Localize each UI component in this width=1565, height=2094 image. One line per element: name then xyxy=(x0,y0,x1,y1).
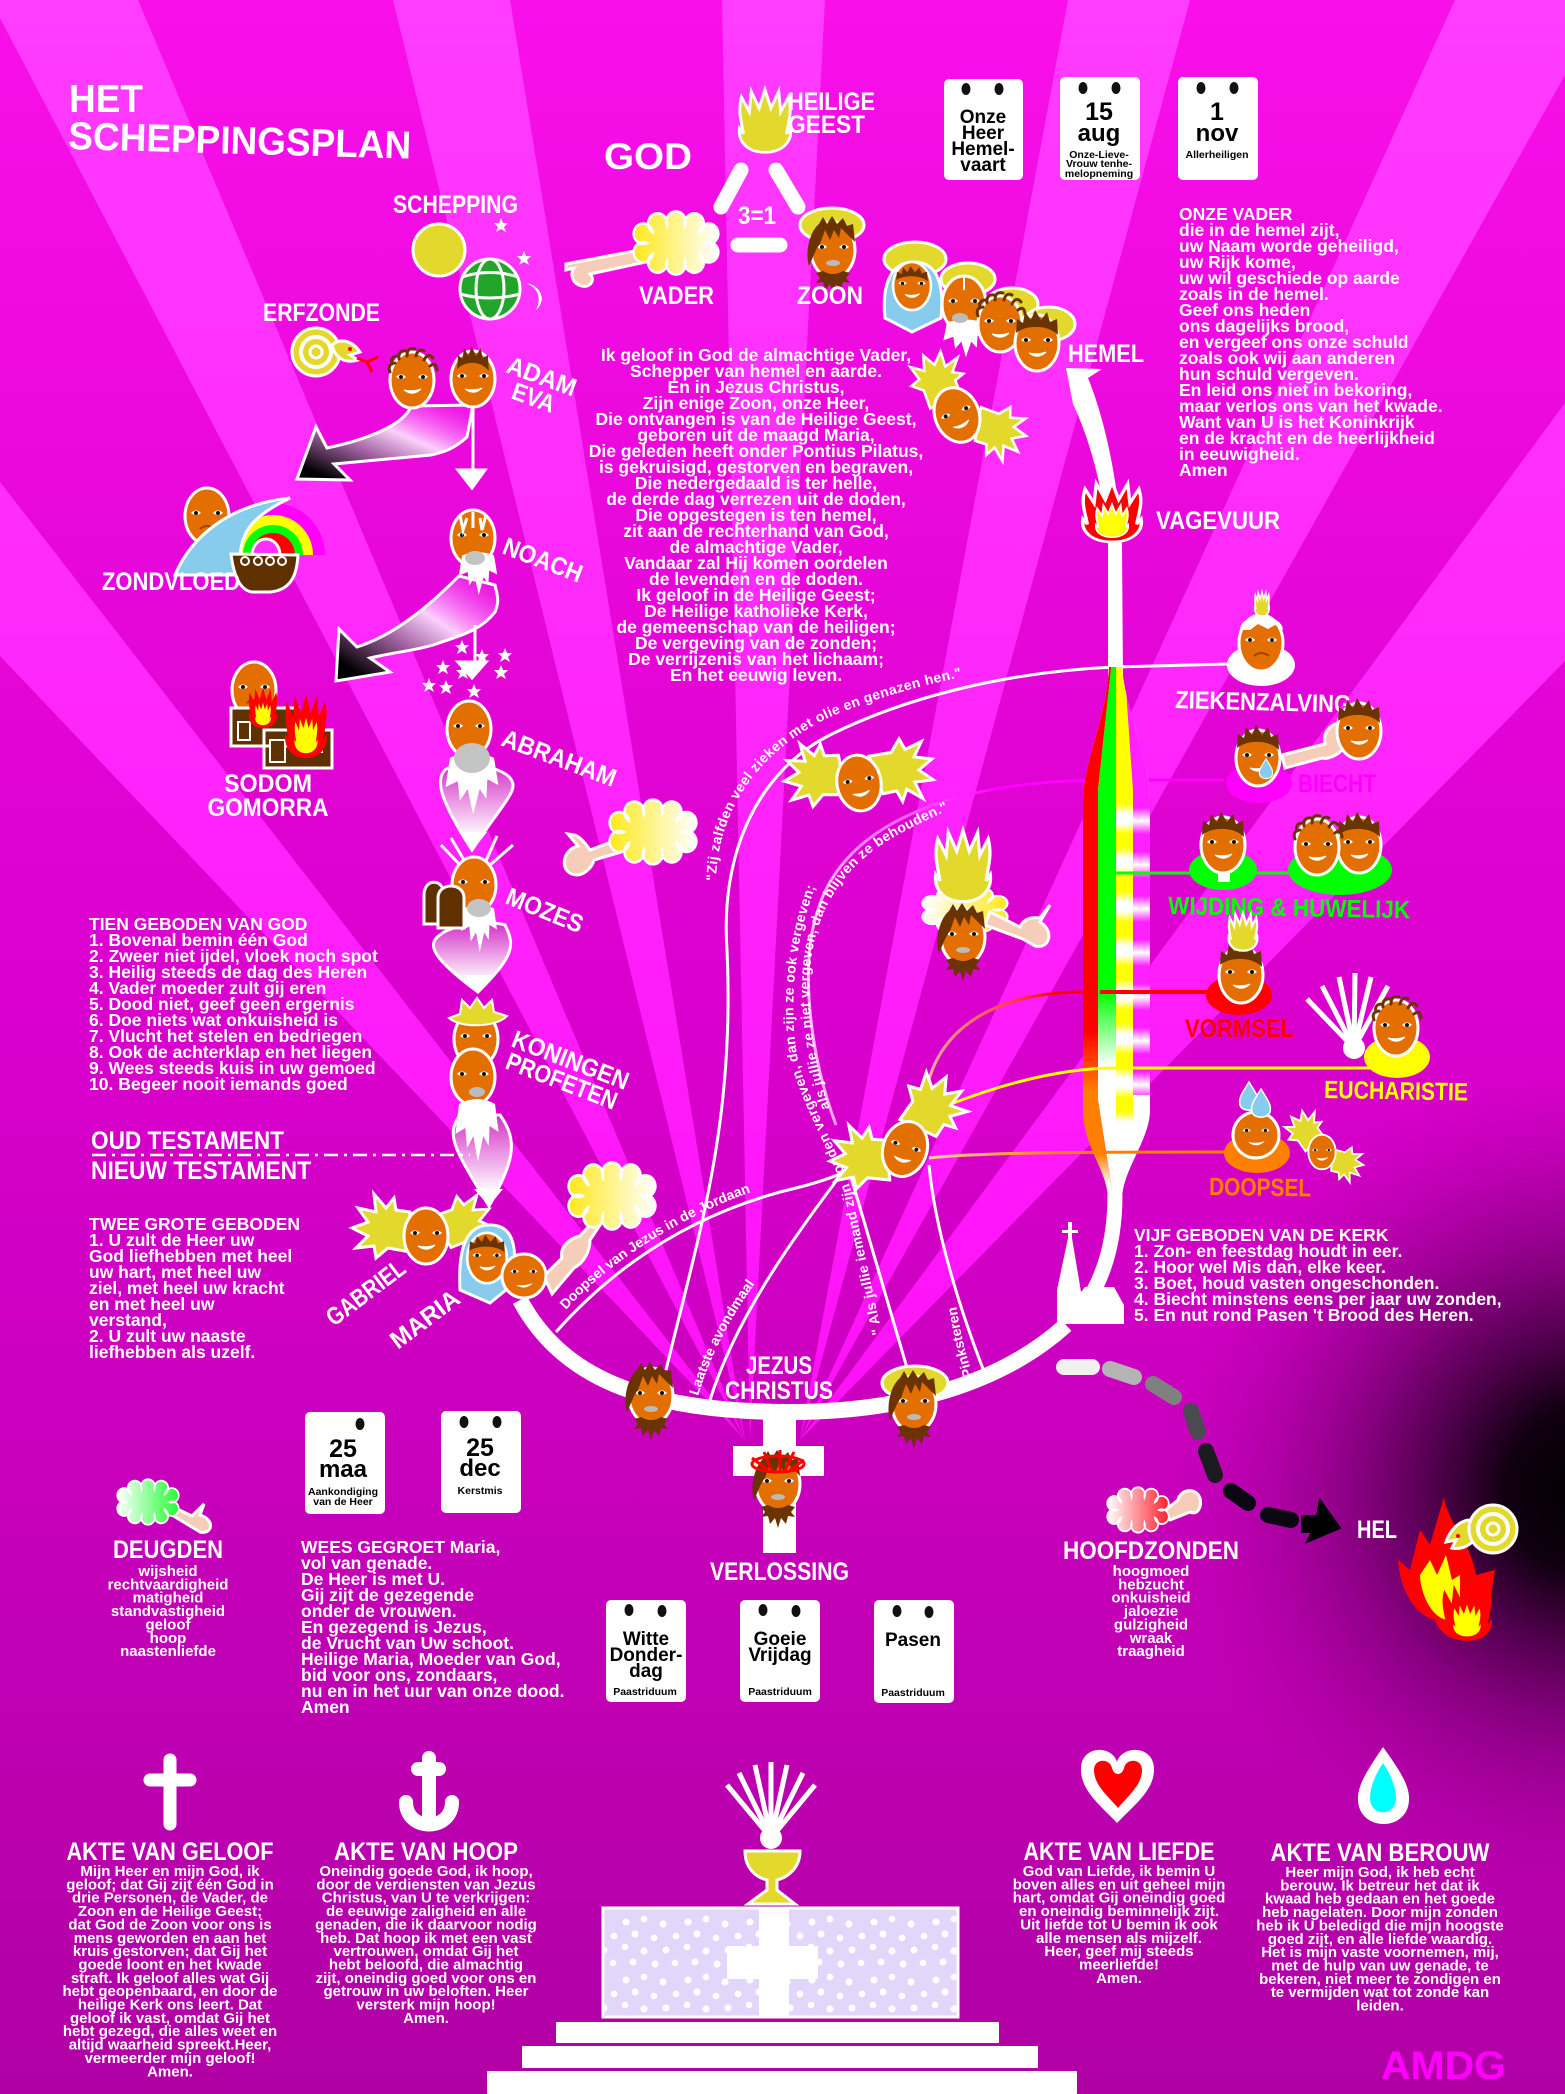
act of contrition: goed zijt, en alle liefde waardig. xyxy=(1268,1931,1492,1948)
list: deadly sins: traagheid xyxy=(1117,1643,1185,1660)
God the Father cloud with hand xyxy=(566,211,718,286)
text: apostles creed: De vergeving van de zonden; xyxy=(635,633,877,653)
text: Hail Mary: En gezegend is Jezus, xyxy=(301,1617,487,1637)
icon: hell fire and serpent xyxy=(1398,1497,1517,1641)
label: Sodom Gomorra: GOMORRA xyxy=(208,794,328,822)
calendar: Witte Donderdag: Witte xyxy=(623,1629,669,1650)
calendar: Onze Heer Hemelvaart: Hemel- xyxy=(951,139,1015,160)
act of hope: Amen. xyxy=(403,2010,449,2027)
text: five commandments of the church: 2. Hoor wel Mis dan, elke keer. xyxy=(1134,1257,1386,1277)
creation: sun, earth, stars xyxy=(413,218,542,319)
text: apostles creed: de derde dag verrezen uit de doden, xyxy=(606,489,906,509)
text: ten commandments: 7. Vlucht het stelen en bedriegen xyxy=(89,1026,362,1046)
act of faith: Amen. xyxy=(147,2063,193,2080)
calendar: 25 dec: dec xyxy=(459,1455,501,1482)
title xyxy=(68,78,412,168)
calendar: Witte Donderdag xyxy=(606,1600,686,1702)
altar steps xyxy=(487,2022,1077,2094)
God cloud with hand at Abraham xyxy=(564,800,696,875)
label: Sodom Gomorra: SODOM xyxy=(224,770,312,798)
text: apostles creed: En het eeuwig leven. xyxy=(670,665,842,685)
calendar: Goede Vrijdag: Goeie xyxy=(754,1629,806,1650)
curved text: sayings: Laatste avondmaal xyxy=(689,1278,754,1396)
calendar: 15 aug: 15 xyxy=(1085,98,1113,126)
act of faith: geloof ik vast, omdat Gij het xyxy=(70,2010,270,2027)
text: Hail Mary: bid voor ons, zondaars, xyxy=(301,1665,497,1685)
text: Hail Mary: onder de vrouwen. xyxy=(301,1601,457,1621)
act of love: God van Liefde, ik bemin U xyxy=(1023,1863,1215,1880)
act of contrition: berouw. Ik betreur het dat ik xyxy=(1280,1877,1480,1894)
text: Onze Vader prayer: en vergeef ons onze schuld xyxy=(1179,332,1408,352)
Eve xyxy=(389,349,437,408)
text: apostles creed: de gemeenschap van de heiligen; xyxy=(616,617,896,637)
list: virtues: matigheid xyxy=(133,1590,203,1607)
text: apostles creed: de almachtige Vader, xyxy=(669,537,843,557)
God with son and spirit in the middle xyxy=(923,830,1050,981)
list: deadly sins: hebzucht xyxy=(1118,1576,1184,1593)
icon: purgatory fire xyxy=(1083,482,1141,542)
text: five commandments of the church: 4. Biecht minstens eens per jaar uw zonden, xyxy=(1134,1289,1502,1309)
text: apostles creed: De Heilige katholieke Kerk, xyxy=(644,601,868,621)
sin arrow from Noah xyxy=(336,576,498,681)
act of contrition: AKTE VAN BEROUW xyxy=(1270,1839,1490,1867)
text: Hail Mary: Gij zijt de gezegende xyxy=(301,1585,474,1605)
heading: Hoofdzonden: HOOFDZONDEN xyxy=(1063,1537,1239,1565)
text: Onze Vader prayer: ons dagelijks brood, xyxy=(1179,316,1349,336)
calendar: 1 nov: Allerheiligen xyxy=(1185,149,1249,161)
calendar: 25 maa: Aankondiging xyxy=(308,1486,378,1498)
label: Hel: HEL xyxy=(1357,1516,1397,1544)
act of love: boven alles en uit geheel mijn xyxy=(1013,1876,1225,1893)
calendar: 25 dec xyxy=(441,1411,521,1513)
act of faith: Zoon en de Heilige Geest; xyxy=(78,1903,262,1920)
act of hope: Christus, van U te verkrijgen: xyxy=(322,1890,530,1907)
sacrament: holy orders and matrimony xyxy=(1116,812,1392,895)
text: ten commandments: 4. Vader moeder zult gij eren xyxy=(89,978,326,998)
calendar: 15 aug: melopneming xyxy=(1065,168,1133,180)
act of love: Heer, geef mij steeds xyxy=(1044,1943,1194,1960)
act of contrition: heb nagelaten. Door mijn zonden xyxy=(1262,1904,1498,1921)
angel at sacraments xyxy=(827,1064,977,1191)
label: Jezus Christus xyxy=(725,1352,833,1405)
sin arrow from Eve and Adam xyxy=(297,405,473,480)
label: Gabriel: GABRIEL xyxy=(321,1254,411,1332)
trinity triangle: 3=1 xyxy=(738,202,776,230)
calendar: 15 aug: Onze-Lieve- xyxy=(1069,149,1129,161)
label: Eva: EVA xyxy=(508,377,559,419)
label: Maria: MARIA xyxy=(385,1284,466,1355)
risen Jesus xyxy=(882,1366,948,1448)
act of faith: heilige Kerk ons leert. Dat xyxy=(78,1996,262,2014)
label: Zoon: ZOON xyxy=(797,282,863,310)
text: apostles creed: En in Jezus Christus, xyxy=(668,377,844,397)
text: ten commandments: 10. Begeer nooit iemands goed xyxy=(89,1074,348,1094)
calendar: Goede Vrijdag xyxy=(740,1600,820,1702)
calendar: 25 maa: 25 xyxy=(329,1435,357,1463)
label: Adam: ADAM xyxy=(503,351,580,402)
act of contrition: leiden. xyxy=(1356,1998,1404,2014)
act of contrition: met de hulp van uw genade, te xyxy=(1271,1957,1489,1974)
act of faith: altijd waarheid spreekt.Heer, xyxy=(69,2037,271,2054)
calendar: Witte Donderdag: dag xyxy=(629,1661,663,1682)
heading: God: GOD xyxy=(604,136,692,177)
curved text: sayings: "Zij zalfden veel zieken met olie en genazen hen." xyxy=(706,668,960,880)
divider: old and new testament xyxy=(91,1127,470,1185)
text: Onze Vader prayer: zoals ook wij aan anderen xyxy=(1179,348,1395,368)
label: Koningen Profeten: PROFETEN xyxy=(502,1047,621,1116)
text: two great commandments: verstand, xyxy=(89,1310,167,1330)
text: ten commandments: TIEN GEBODEN VAN GOD xyxy=(89,914,307,934)
act of hope: zijt, oneindig goed voor ons en xyxy=(316,1970,536,1987)
calendar: 25 dec: 25 xyxy=(466,1434,494,1462)
text: Hail Mary: WEES GEGROET Maria, xyxy=(301,1537,500,1557)
calendar: 1 nov: 1 xyxy=(1210,98,1224,126)
trinity triangle xyxy=(721,170,798,245)
arc from church trunk xyxy=(1093,1195,1115,1292)
list: virtues: hoop xyxy=(150,1630,186,1647)
label: Heilige Geest: HEILIGE xyxy=(788,88,875,116)
kings and prophets xyxy=(449,998,511,1206)
calendar: 25 maa: van de Heer xyxy=(313,1496,373,1508)
text: Onze Vader prayer: Geef ons heden xyxy=(1179,300,1310,320)
icon: love heart xyxy=(1081,1750,1154,1823)
icon: hope anchor xyxy=(406,1758,452,1824)
sacrament: anointing of the sick xyxy=(1227,592,1295,686)
Adam xyxy=(451,346,495,407)
act of hope: de eeuwige zaligheid en alle xyxy=(326,1903,526,1920)
calendar: Pasen: Pasen xyxy=(885,1630,941,1651)
text: two great commandments: ziel, met heel uw kracht xyxy=(89,1278,285,1298)
text: five commandments of the church: 1. Zon- en feestdag houdt in eer. xyxy=(1134,1241,1402,1261)
sacrament: baptism xyxy=(929,1082,1365,1184)
text: Hail Mary: de Vrucht van Uw schoot. xyxy=(301,1633,514,1653)
label: Abraham: ABRAHAM xyxy=(498,724,620,793)
curved text: sayings: Pinksteren xyxy=(949,1307,972,1376)
label: Vagevuur: VAGEVUUR xyxy=(1156,507,1280,535)
list: virtues: geloof xyxy=(146,1616,191,1633)
text: Onze Vader prayer: hun schuld vergeven. xyxy=(1179,364,1359,384)
text: apostles creed: zit aan de rechterhand van God, xyxy=(623,521,889,541)
crucifix xyxy=(733,1415,824,1553)
calendar: Goede Vrijdag: Paastriduum xyxy=(748,1686,812,1698)
signature: AMDG: AMDG xyxy=(1381,2044,1506,2088)
act of hope: door de verdiensten van Jezus xyxy=(316,1876,536,1893)
text: apostles creed: Schepper van hemel en aarde. xyxy=(630,361,882,381)
Jesus at baptism xyxy=(625,1362,673,1440)
arrow: Noah to Abraham xyxy=(458,625,486,678)
act of hope: genaden, die ik daarvoor nodig xyxy=(315,1916,537,1933)
act of hope: AKTE VAN HOOP xyxy=(334,1838,518,1866)
main arc of salvation xyxy=(520,1300,1066,1412)
label: Heilige Geest xyxy=(788,88,875,139)
text: apostles creed: Ik geloof in God de almachtige Vader, xyxy=(601,345,911,365)
text: Onze Vader prayer: Want van U is het Koninkrijk xyxy=(1179,412,1415,432)
calendar: Onze Heer Hemelvaart: Heer xyxy=(962,123,1005,144)
list: virtues: standvastigheid xyxy=(111,1603,225,1620)
list: virtues: rechtvaardigheid xyxy=(108,1576,228,1593)
calendar: 25 maa xyxy=(305,1412,385,1514)
saints in heaven xyxy=(884,242,1075,371)
label: Erfzonde: ERFZONDE xyxy=(263,299,380,327)
text: apostles creed: geboren uit de maagd Maria, xyxy=(637,425,875,445)
act of hope: versterk mijn hoop! xyxy=(356,1996,496,2014)
label: Eucharistie: EUCHARISTIE xyxy=(1324,1076,1468,1107)
calendar: Pasen xyxy=(874,1600,954,1703)
text: Hail Mary: nu en in het uur van onze dood. xyxy=(301,1681,564,1701)
label: Koningen Profeten: KONINGEN xyxy=(508,1025,633,1096)
curved lines of Christ's sayings xyxy=(556,664,1228,1400)
text: apostles creed: Die opgestegen is ten hemel, xyxy=(635,505,877,525)
label: Heilige Geest: GEEST xyxy=(788,111,865,139)
text: apostles creed: Vandaar zal Hij komen oordelen xyxy=(624,553,888,573)
text: two great commandments: God liefhebben met heel xyxy=(89,1246,292,1266)
Noah xyxy=(451,510,497,595)
text: ten commandments: 9. Wees steeds kuis in uw gemoed xyxy=(89,1058,376,1078)
calendar: Witte Donderdag: Paastriduum xyxy=(613,1686,677,1698)
label: Wijding en Huwelijk: WIJDING & HUWELIJK xyxy=(1168,892,1410,924)
act of contrition: te vermijden wat tot zonde kan xyxy=(1271,1984,1489,2001)
label: Ziekenzalving: ZIEKENZALVING xyxy=(1175,686,1352,719)
curved text: sayings: als jullie ze niet vergeven, dan blijven ze behouden." xyxy=(800,802,945,1110)
label: Zondvloed: ZONDVLOED xyxy=(102,568,240,596)
act of hope xyxy=(315,1838,537,2027)
text: two great commandments: TWEE GROTE GEBODEN xyxy=(89,1214,300,1234)
text: Onze Vader prayer: Amen xyxy=(1179,460,1228,480)
text: apostles creed: Die geleden heeft onder Pontius Pilatus, xyxy=(589,441,923,461)
text: Onze Vader prayer: en de kracht en de heerlijkheid xyxy=(1179,428,1435,448)
act of contrition: kwaad heb gedaan en het goede xyxy=(1265,1891,1495,1908)
text: ten commandments: 2. Zweer niet ijdel, vloek noch spot xyxy=(89,946,378,966)
text: Onze Vader prayer: zoals in de hemel. xyxy=(1179,284,1329,304)
text: apostles creed: Die nedergedaald is ter helle, xyxy=(635,473,877,493)
text: apostles creed: De verrijzenis van het lichaam; xyxy=(628,649,884,669)
divider: old and new testament: NIEUW TESTAMENT xyxy=(91,1157,311,1185)
act of faith: AKTE VAN GELOOF xyxy=(66,1838,274,1866)
calendar: Witte Donderdag: Donder- xyxy=(610,1645,682,1666)
Mary with Child and God's hand xyxy=(460,1163,655,1303)
act of faith: mens geworden en aan het xyxy=(74,1930,266,1947)
sacrament: eucharist xyxy=(951,973,1430,1104)
icon: virtues cloud with hand xyxy=(117,1479,211,1532)
title: SCHEPPINGSPLAN xyxy=(68,115,412,168)
calendar: Onze Heer Hemelvaart: Onze xyxy=(960,107,1006,128)
calendar: 25 maa: maa xyxy=(319,1456,368,1483)
church xyxy=(1057,1222,1124,1324)
calendar: Goede Vrijdag: Vrijdag xyxy=(748,1645,812,1666)
text: Onze Vader prayer: uw Naam worde geheiligd, xyxy=(1179,236,1399,256)
act of faith: kruis gestorven; dat Gij het xyxy=(73,1943,267,1960)
act of hope: vertrouwen, omdat Gij het xyxy=(333,1943,519,1960)
act of contrition: bekeren, niet meer te zondigen en xyxy=(1259,1971,1501,1988)
flood with ark and rainbow xyxy=(175,488,325,592)
act of hope: getrouw in uw beloften. Heer xyxy=(323,1983,529,2000)
icon: holy spirit flame xyxy=(739,90,791,152)
text: apostles creed: Ik geloof in de Heilige Geest; xyxy=(636,585,876,605)
text: five commandments of the church: 5. En nut rond Pasen 't Brood des Heren. xyxy=(1134,1305,1474,1325)
act of love: hart, omdat Gij oneindig goed xyxy=(1013,1890,1225,1907)
act of love: meerliefde! xyxy=(1079,1956,1159,1973)
text: Hail Mary: vol van genade. xyxy=(301,1553,432,1573)
text: Onze Vader prayer: ONZE VADER xyxy=(1179,204,1293,224)
text: five commandments of the church: 3. Boet, houd vasten ongeschonden. xyxy=(1134,1273,1439,1293)
heading: Deugden: DEUGDEN xyxy=(113,1536,223,1564)
angel near heaven xyxy=(901,341,1030,464)
icon: deadly sins cloud with hand xyxy=(1107,1487,1201,1533)
sacrament: confession xyxy=(1226,698,1381,803)
label: Jezus Christus: JEZUS xyxy=(746,1352,812,1380)
text: apostles creed: Zijn enige Zoon, onze Heer, xyxy=(643,393,869,413)
act of contrition: Heer mijn God, ik heb echt xyxy=(1285,1864,1475,1881)
label: Doopsel: DOOPSEL xyxy=(1209,1173,1311,1202)
act of faith: straft. Ik geloof alles wat Gij xyxy=(71,1970,269,1987)
icon: serpent xyxy=(292,328,378,376)
title: HET xyxy=(69,78,143,121)
act of faith: dat God de Zoon voor ons is xyxy=(68,1916,272,1933)
calendar: 15 aug: Vrouw tenhe- xyxy=(1066,158,1132,170)
text: apostles creed: Die ontvangen is van de Heilige Geest, xyxy=(596,409,916,429)
label: Mozes: MOZES xyxy=(502,883,587,939)
calendar: 1 nov: nov xyxy=(1196,120,1239,147)
calendar: 1 nov xyxy=(1178,77,1258,180)
act of love: en oneindig beminnelijk zijt. xyxy=(1019,1903,1219,1920)
act of faith: goede loont en het kwade xyxy=(78,1956,262,1973)
curved text: sayings xyxy=(559,668,972,1396)
text: Onze Vader prayer: die in de hemel zijt, xyxy=(1179,220,1339,240)
stars of Abraham xyxy=(422,640,512,698)
text: Onze Vader prayer: uw Rijk kome, xyxy=(1179,252,1296,272)
calendar: Pasen: Paastriduum xyxy=(881,1687,945,1699)
curved text: sayings: " Als jullie iemand zijn zonden vergeven, dan zijn ze ook vergeven; xyxy=(783,886,880,1336)
calendar: 15 aug xyxy=(1060,77,1140,180)
text: Onze Vader prayer: maar verlos ons van het kwade. xyxy=(1179,396,1443,416)
calendar: Onze Heer Hemelvaart: vaart xyxy=(960,155,1006,176)
text: Onze Vader prayer: En leid ons niet in bekoring, xyxy=(1179,380,1412,400)
act of love: AKTE VAN LIEFDE xyxy=(1024,1838,1214,1866)
act of love xyxy=(1013,1838,1225,1987)
text: Onze Vader prayer: uw wil geschiede op aarde xyxy=(1179,268,1400,288)
label: Sodom Gomorra xyxy=(208,770,328,822)
text: ten commandments: 3. Heilig steeds de dag des Heren xyxy=(89,962,367,982)
label: Vormsel: VORMSEL xyxy=(1185,1015,1294,1043)
list: deadly sins: jaloezie xyxy=(1123,1603,1178,1620)
list: deadly sins: wraak xyxy=(1129,1630,1173,1647)
list: virtues: wijsheid xyxy=(137,1563,198,1580)
label: Vader: VADER xyxy=(639,282,714,310)
text: ten commandments: 8. Ook de achterklap en het liegen xyxy=(89,1042,372,1062)
label: Schepping: SCHEPPING xyxy=(393,191,518,219)
act of faith xyxy=(62,1838,278,2080)
Moses with commandment tablets xyxy=(424,836,513,992)
act of love: Uit liefde tot U bemin ik ook xyxy=(1020,1916,1218,1933)
sacrament column xyxy=(1083,667,1150,1195)
path to hell xyxy=(1064,1367,1340,1542)
calendar: Onze Heer Hemelvaart xyxy=(944,79,1023,180)
label: Verlossing: VERLOSSING xyxy=(710,1558,849,1586)
text: two great commandments: 1. U zult de Heer uw xyxy=(89,1230,255,1250)
icon: faith cross xyxy=(150,1760,190,1824)
act of contrition: Het is mijn vaste voornemen, mij, xyxy=(1261,1944,1499,1961)
icon: repentance tear xyxy=(1358,1747,1409,1824)
act of faith: hebt geopenbaard, en door de xyxy=(62,1983,278,2000)
label: Hemel: HEMEL xyxy=(1068,340,1144,368)
label: Noach: NOACH xyxy=(499,532,586,588)
text: Onze Vader prayer: in eeuwigheid. xyxy=(1179,444,1300,464)
text: two great commandments: uw hart, met heel uw xyxy=(89,1262,261,1282)
list: virtues: naastenliefde xyxy=(120,1643,216,1660)
text: Hail Mary: Heilige Maria, Moeder van God, xyxy=(301,1649,561,1669)
angel at confession xyxy=(778,731,943,814)
list: deadly sins: onkuisheid xyxy=(1111,1590,1191,1607)
list: deadly sins: gulzigheid xyxy=(1114,1616,1188,1633)
sacrament: confirmation xyxy=(926,913,1272,1097)
act of faith: hebt gezegd, die alles weet en xyxy=(63,2023,277,2040)
altar with cross xyxy=(603,1908,958,2017)
act of hope: heb. Dat hoop ik met een vast xyxy=(320,1930,532,1947)
text: Hail Mary: Amen xyxy=(301,1697,350,1717)
act of faith: drie Personen, de Vader, de xyxy=(72,1890,268,1907)
text: ten commandments: 6. Doe niets wat onkuisheid is xyxy=(89,1010,338,1030)
text: ten commandments: 1. Bovenal bemin één God xyxy=(89,930,308,950)
act of hope: Oneindig goede God, ik hoop, xyxy=(319,1863,533,1880)
text: two great commandments: liefhebben als uzelf. xyxy=(89,1342,255,1362)
text: apostles creed: is gekruisigd, gestorven en begraven, xyxy=(599,457,913,477)
text: two great commandments: 2. U zult uw naaste xyxy=(89,1326,246,1346)
curved text: sayings: Doopsel van Jezus in de Jordaan xyxy=(559,1186,750,1310)
Abraham xyxy=(440,701,513,850)
God the Son xyxy=(800,208,864,294)
act of faith: Mijn Heer en mijn God, ik xyxy=(80,1863,260,1880)
act of faith: vermeerder mijn geloof! xyxy=(85,2050,255,2067)
text: Hail Mary: De Heer is met U. xyxy=(301,1569,445,1589)
calendar: 15 aug: aug xyxy=(1078,120,1120,147)
act of contrition: heb ik U beledigd die mijn hoogste xyxy=(1256,1917,1504,1934)
divider: old and new testament: OUD TESTAMENT xyxy=(91,1127,284,1155)
act of love: Amen. xyxy=(1096,1970,1142,1987)
list: deadly sins: hoogmoed xyxy=(1113,1563,1189,1580)
label: Biecht: BIECHT xyxy=(1298,770,1376,798)
arrow: Adam to Noah xyxy=(458,404,485,488)
act of contrition xyxy=(1256,1839,1504,2014)
text: five commandments of the church: VIJF GEBODEN VAN DE KERK xyxy=(1134,1225,1389,1245)
text: ten commandments: 5. Dood niet, geef geen ergernis xyxy=(89,994,355,1014)
act of faith: geloof; dat Gij zijt één God in xyxy=(66,1876,274,1893)
Gabriel angel xyxy=(352,1186,504,1264)
act of hope: hebt beloofd, die almachtig xyxy=(329,1956,523,1973)
monstrance and chalice xyxy=(727,1762,815,1904)
label: Jezus Christus: CHRISTUS xyxy=(725,1377,833,1405)
act of love: alle mensen als mijzelf. xyxy=(1036,1930,1202,1947)
arrow to heaven xyxy=(1066,368,1123,680)
Sodom and Gomorrah xyxy=(231,662,332,768)
text: two great commandments: en met heel uw xyxy=(89,1294,215,1314)
calendar: 25 dec: Kerstmis xyxy=(458,1485,503,1497)
text: apostles creed: de levenden en de doden. xyxy=(649,569,863,589)
